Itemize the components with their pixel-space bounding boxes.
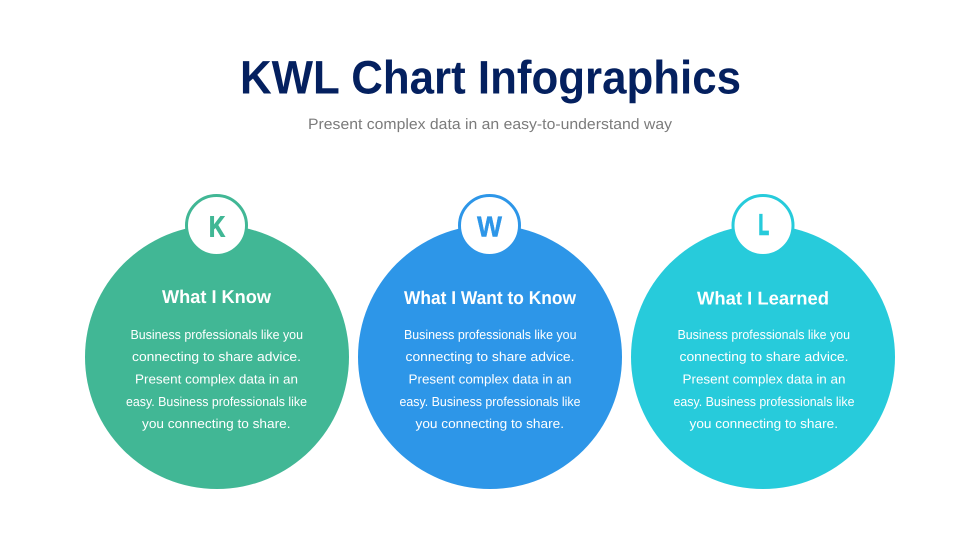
heading: What I Know: What I Know: [162, 286, 272, 307]
body text: K: [126, 327, 307, 431]
panel: W what I want to know: [358, 196, 622, 489]
body text: K: connecting to share advice.: [132, 349, 301, 364]
subtitle: Present complex data in an easy-to-understand way: [308, 116, 673, 133]
body text: W: [400, 327, 580, 431]
title: KWL Chart Infographics: [240, 50, 741, 104]
panel: L what I learned: [631, 196, 895, 489]
badge: L: [733, 196, 793, 256]
panel: K what I know: [85, 196, 349, 489]
heading: What I Want to Know: What I Want to Know: [404, 287, 577, 308]
body text: K: easy. Business professionals like: [126, 394, 307, 409]
body text: L: you connecting to share.: [690, 416, 838, 431]
body text: L: easy. Business professionals like: [674, 394, 854, 409]
badge: W: [460, 196, 520, 256]
badge: L: L: [758, 210, 769, 242]
body text: K: Present complex data in an: [135, 372, 298, 386]
circle: W background: [358, 225, 622, 489]
body text: W: Present complex data in an: [408, 372, 572, 386]
body text: W: you connecting to share.: [416, 416, 564, 431]
body text: W: easy. Business professionals like: [400, 394, 580, 409]
badge: W: W: [477, 212, 503, 244]
body text: K: Business professionals like you: [130, 327, 303, 342]
body text: L: Present complex data in an: [682, 372, 846, 386]
body text: L: connecting to share advice.: [680, 349, 848, 364]
body text: W: Business professionals like you: [404, 327, 576, 342]
circle: K background: [85, 225, 349, 489]
badge: K: [186, 196, 246, 256]
body text: K: you connecting to share.: [142, 416, 290, 431]
body text: L: Business professionals like you: [678, 327, 850, 342]
body text: W: connecting to share advice.: [406, 349, 574, 364]
heading: What I Learned: What I Learned: [697, 288, 829, 308]
badge: K: K: [209, 212, 225, 244]
body text: L: [674, 327, 854, 431]
circle: L background: [631, 225, 895, 489]
